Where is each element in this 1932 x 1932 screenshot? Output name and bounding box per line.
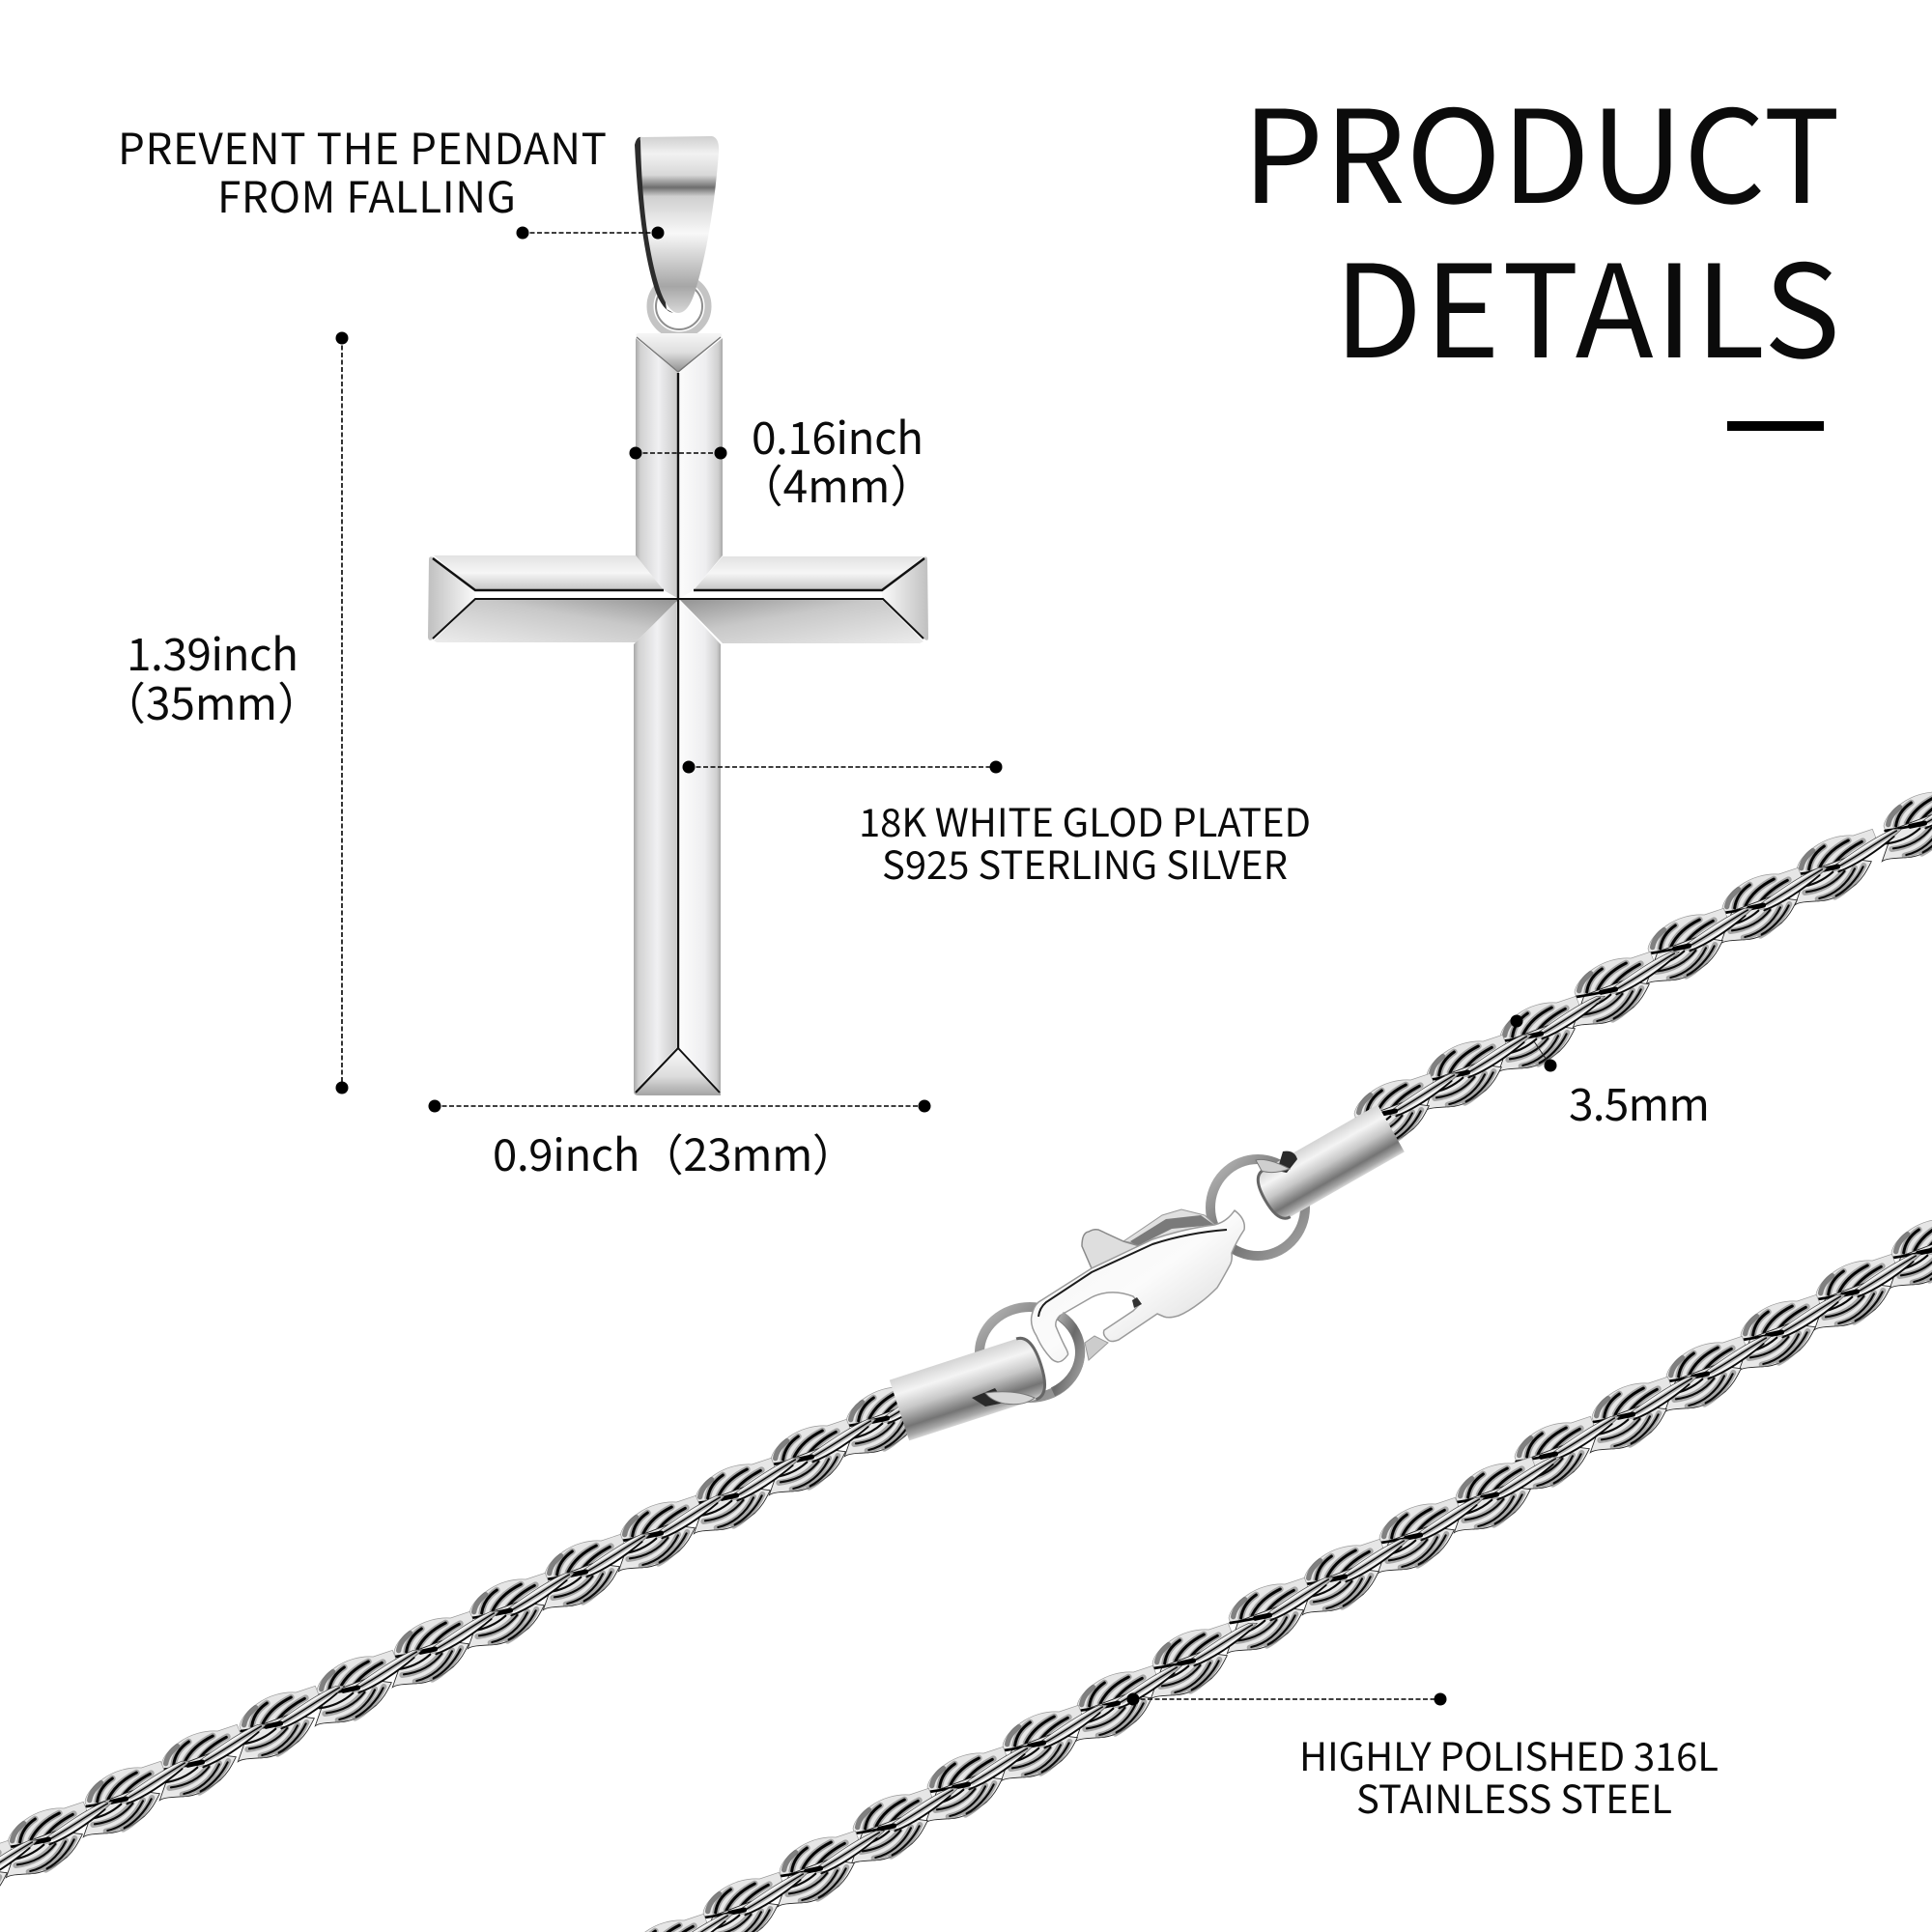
label: height value: 1.39inch: [127, 620, 298, 684]
lobster clasp assembly: [890, 1105, 1405, 1440]
label: pendant material: [859, 792, 1311, 891]
title: DETAILS: [1334, 210, 1840, 395]
label: chain material: HIGHLY POLISHED 316L: [1299, 1726, 1719, 1782]
left ring front arc: [1053, 1316, 1080, 1392]
callout: pendant material: [682, 761, 1003, 773]
title: [1242, 55, 1840, 395]
left connecting ring: [980, 1307, 1080, 1398]
label: pendant material: 18K WHITE GLOD PLATED: [859, 792, 1311, 848]
label: pendant material: S925 STERLING SILVER: [882, 835, 1288, 891]
label: height value: （35mm）: [101, 669, 322, 733]
callout: chain material: [1126, 1692, 1447, 1706]
right connecting ring: [1210, 1159, 1305, 1256]
clasp lower tab: [1085, 1336, 1108, 1360]
pendant bail and jump ring: [635, 136, 719, 335]
lower crimp end cap: [890, 1334, 1051, 1440]
second rope chain: [626, 1171, 1932, 1932]
label: stem width value: 0.16inch: [752, 404, 923, 468]
label: cross width value: 0.9inch（23mm）: [493, 1121, 856, 1184]
title: PRODUCT: [1242, 55, 1840, 241]
label: chain width value: 3.5mm: [1569, 1070, 1710, 1134]
label: prevent the pendant from falling: PREVENT THE PENDANT: [118, 115, 607, 177]
clasp edge line: [1038, 1230, 1227, 1317]
jump ring: [650, 277, 708, 335]
lower left rope chain: [0, 1380, 951, 1917]
cross bottom cap: [634, 1048, 721, 1095]
upper crimp slot and tab: [1256, 1151, 1297, 1173]
upper crimp end cap: [1252, 1105, 1405, 1224]
label: stem width value: （4mm）: [739, 452, 934, 516]
cross top cap: [636, 333, 722, 372]
label: height value: [101, 620, 322, 733]
clasp body: [1032, 1210, 1244, 1362]
cross upper stem: [636, 338, 723, 598]
label: prevent the pendant from falling: FROM FALLING: [217, 163, 516, 225]
lower crimp slot and tab: [972, 1388, 1035, 1406]
cross pendant: [428, 333, 928, 1095]
cross lower stem: [634, 602, 721, 1092]
dimension: cross width: [429, 1099, 931, 1113]
clasp slot notch: [1132, 1297, 1142, 1308]
dimension: stem width: [630, 446, 726, 460]
callout: bail: [516, 226, 665, 240]
cross left arm: [428, 555, 678, 642]
label: stem width value: [739, 404, 934, 516]
cross engraved grooves: [433, 337, 924, 1093]
clasp back strip: [1123, 1209, 1217, 1246]
dimension: height: [336, 332, 348, 1094]
label: prevent the pendant from falling: [118, 115, 607, 225]
dimension: chain width: [1511, 1014, 1557, 1072]
label: chain material: STAINLESS STEEL: [1356, 1769, 1672, 1825]
bail inner shadow: [635, 137, 673, 313]
upper rope chain: [1352, 744, 1932, 1150]
title accent rule: [1727, 421, 1824, 431]
clasp trigger: [1082, 1230, 1143, 1268]
cross right arm: [680, 556, 928, 643]
label: chain material: [1299, 1726, 1719, 1825]
bail front face: [640, 136, 719, 313]
